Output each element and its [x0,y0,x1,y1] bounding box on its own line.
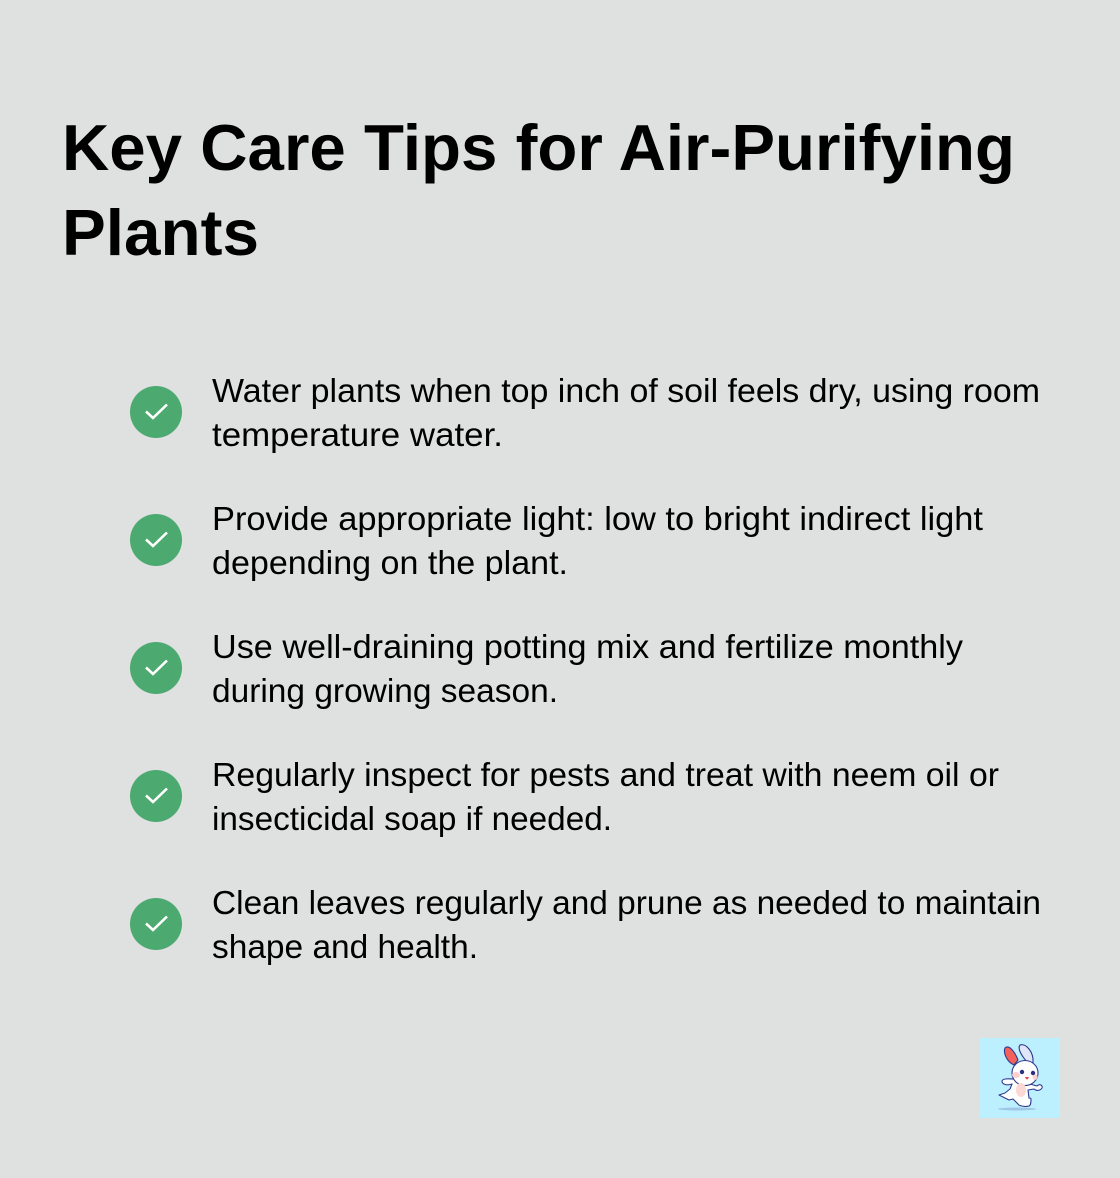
list item 2 [130,501,984,582]
list item 3: Use well-draining potting mix and fertilize monthly [212,629,963,666]
title: Key Care Tips for Air-Purifying [62,111,1015,184]
list item 5 [130,885,1041,966]
list item 1 [130,373,1040,454]
list item 5: Clean leaves regularly and prune as needed to maintain [212,885,1041,922]
list item 4 [130,757,999,838]
checklist [130,373,1041,966]
icon: rabbit logo [980,1038,1060,1118]
list item 3 [130,629,963,710]
list item 5: shape and health. [212,929,478,966]
list item 3: during growing season. [212,673,558,710]
list item 1: Water plants when top inch of soil feels dry, using room [212,373,1040,410]
title [62,111,1015,269]
title: Plants [62,196,259,269]
list item 2: Provide appropriate light: low to bright indirect light [212,501,984,538]
list item 4: Regularly inspect for pests and treat with neem oil or [212,757,999,794]
list item 4: insecticidal soap if needed. [212,801,612,838]
list item 1: temperature water. [212,417,503,454]
list item 2: depending on the plant. [212,545,568,582]
